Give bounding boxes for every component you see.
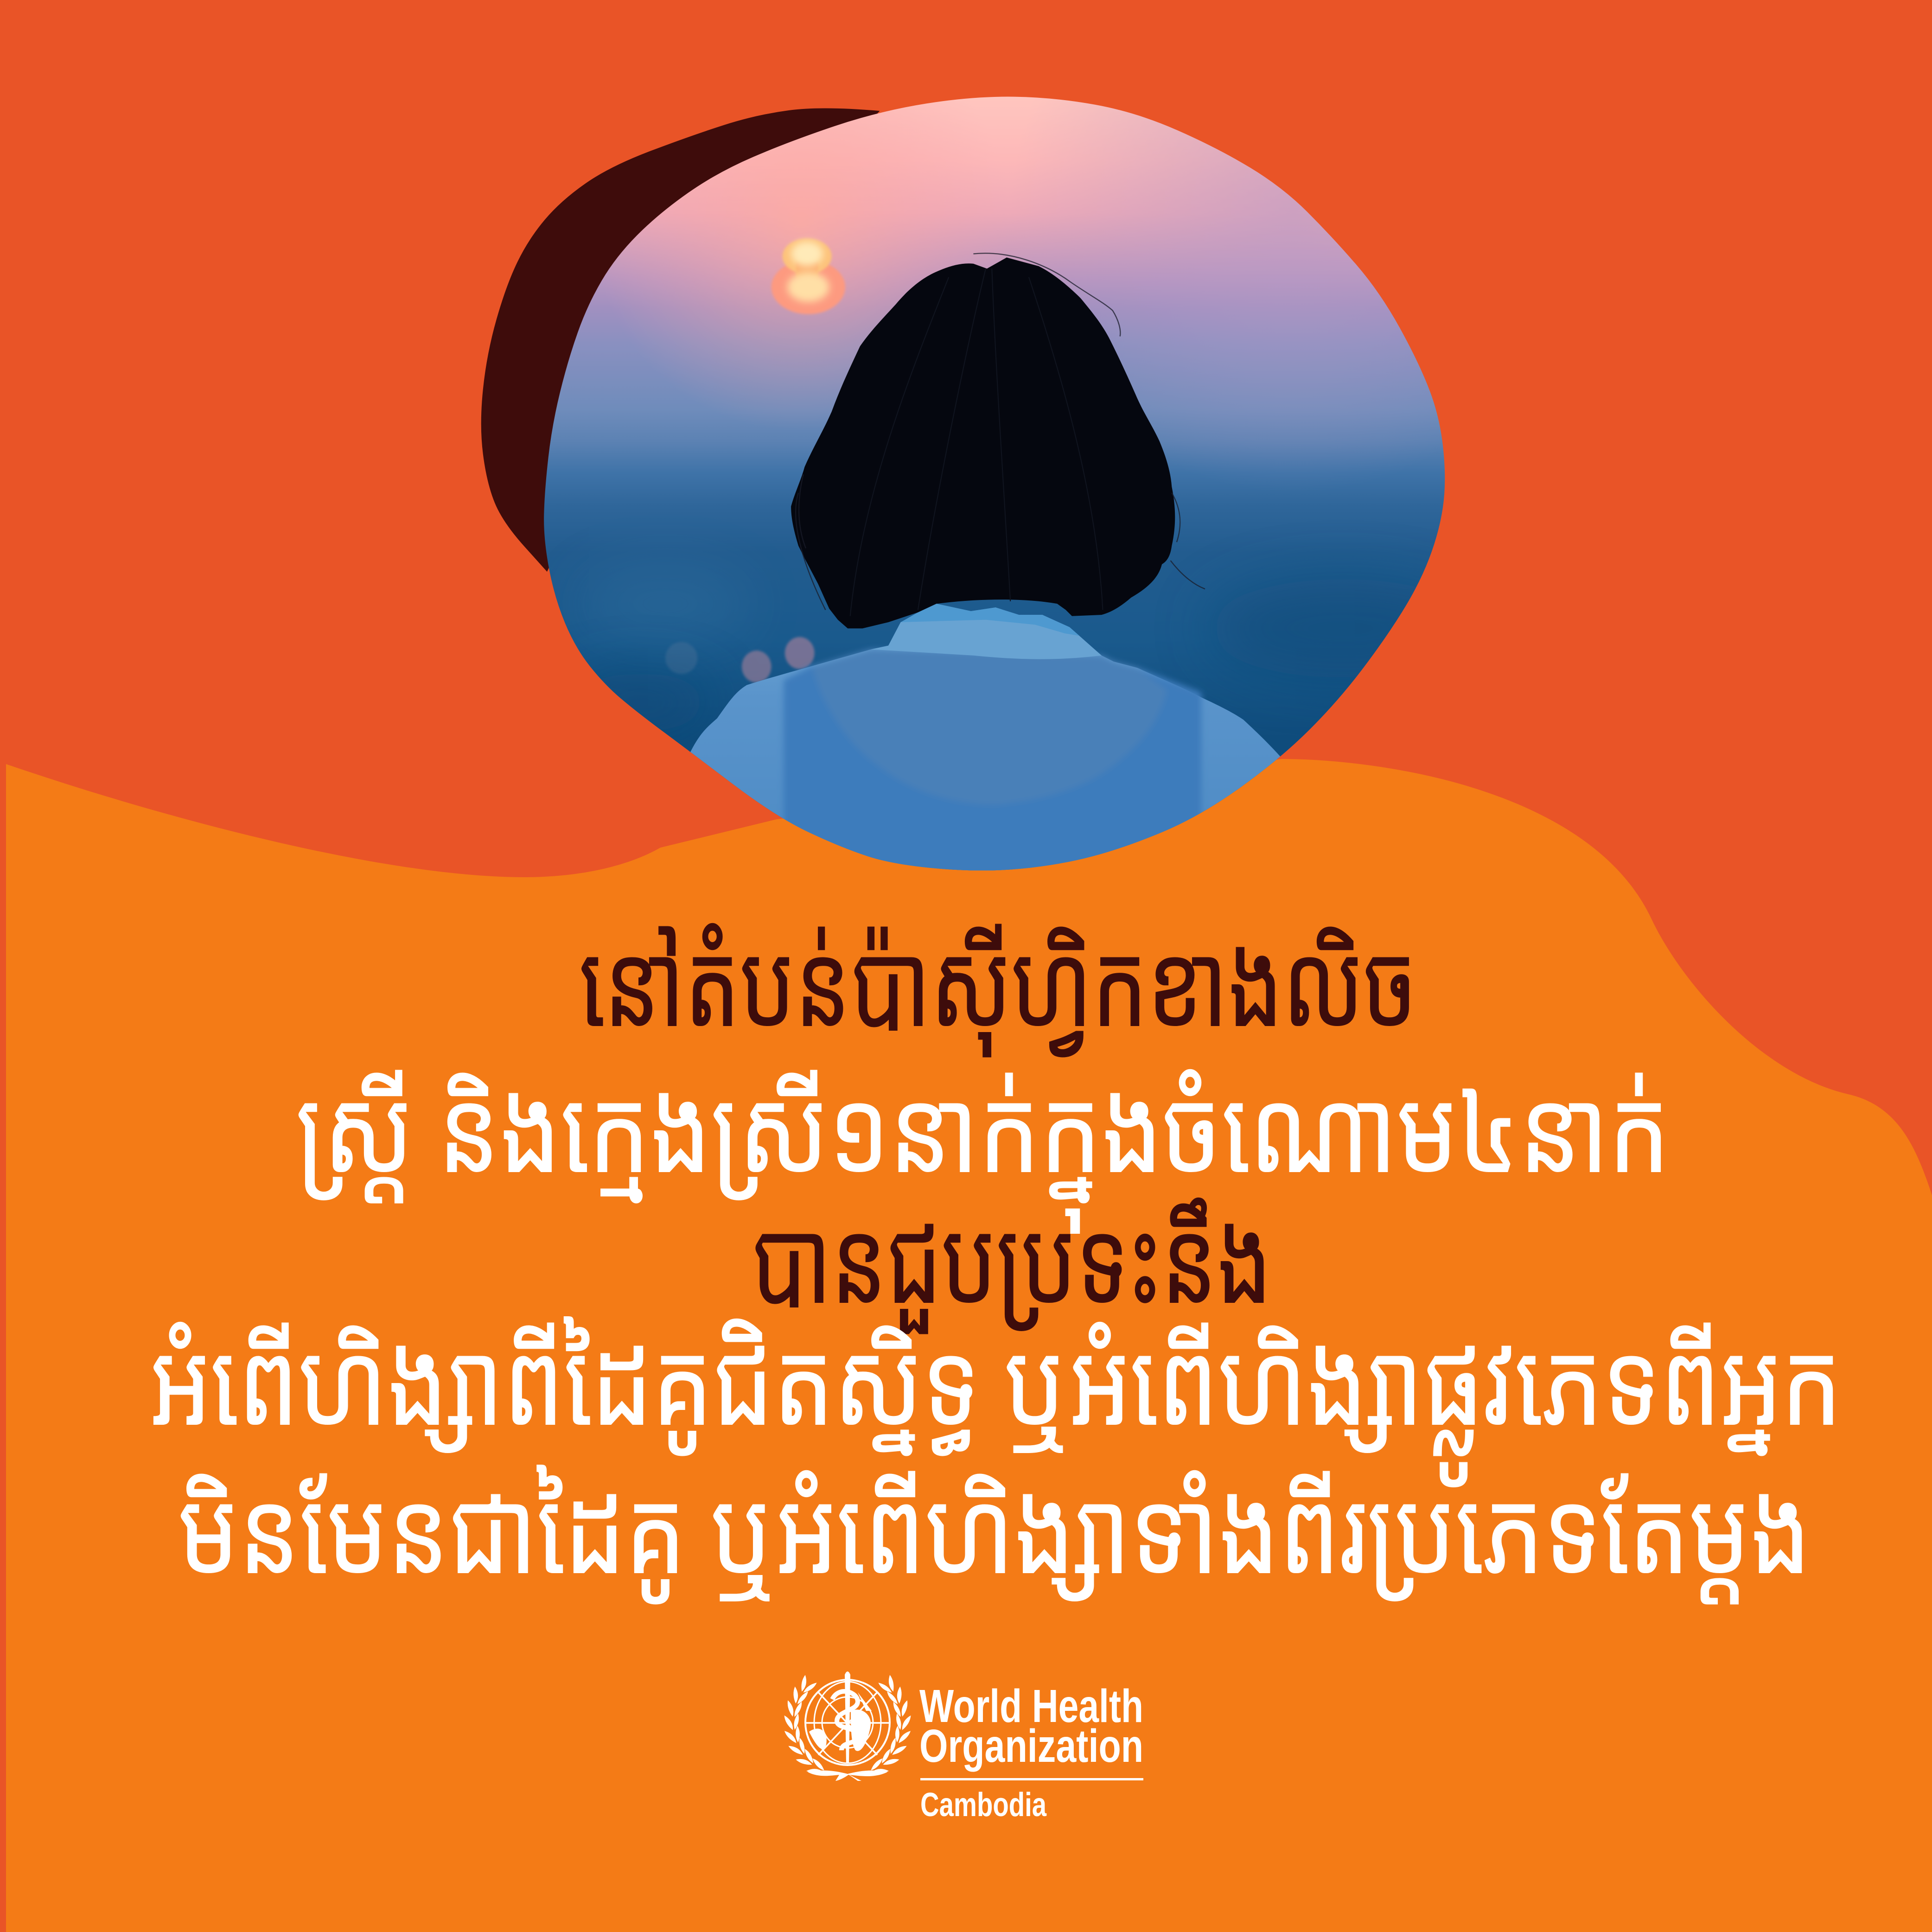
bokeh lights [665, 637, 815, 682]
shirt [690, 604, 1282, 887]
wordmark: World Health [919, 1680, 1143, 1732]
wreath left [784, 1675, 827, 1778]
staff [845, 1671, 850, 1763]
heading line 3: have experienced: បានជួបប្រទះនឹង [752, 1179, 1272, 1337]
wordmark: Organization [919, 1720, 1143, 1772]
hair [791, 253, 1205, 628]
wordmark: Cambodia [920, 1786, 1047, 1824]
globe rings [805, 1680, 890, 1765]
heading line 1: region: នៅតំបន់ប៉ាស៊ីហ្វិកខាងលិច [580, 902, 1417, 1060]
dark blob behind photo [481, 108, 880, 572]
WHO logo [784, 1671, 1143, 1824]
lower orange wave panel [6, 759, 1932, 1932]
wordmark [919, 1680, 1143, 1824]
sun [772, 238, 845, 314]
continents [809, 1692, 872, 1751]
icon: WHO emblem [784, 1671, 911, 1781]
snake [832, 1691, 859, 1750]
heading line 2: one in four women and girls: ស្ត្រី និងក្មេងស្រី១នាក់ក្នុងចំណោម៤នាក់ [296, 1048, 1670, 1233]
ribbon [808, 1771, 887, 1781]
wreath right [868, 1675, 911, 1778]
sky and haze [530, 86, 1479, 881]
photo: woman facing sunset [530, 86, 1479, 887]
